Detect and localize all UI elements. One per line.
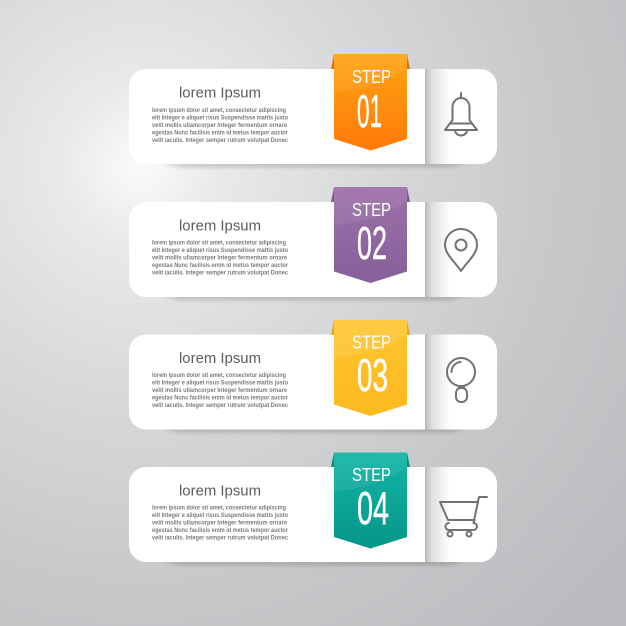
card body [129, 202, 497, 297]
panel: step 4 [129, 452, 497, 565]
text block: velit iaculis. Integer semper rutrum volutpat Donec [152, 534, 288, 542]
card shadow [160, 560, 470, 565]
text block: velit iaculis. Integer semper rutrum volutpat Donec [152, 402, 288, 409]
text block: velit mollis ullamcorper Integer fermentum ornare [152, 520, 287, 526]
card shadow [160, 428, 470, 432]
text block: velit mollis ullamcorper Integer fermentum ornare [152, 122, 287, 129]
icon: cart [440, 497, 487, 536]
heading: lorem Ipsum [179, 482, 261, 500]
text block: egestas Nunc facilisis enim id metus tempor auctor [152, 130, 288, 136]
heading: lorem Ipsum [179, 350, 261, 367]
ribbon: 02 [357, 217, 387, 269]
card fold [425, 202, 497, 297]
text block: velit mollis ullamcorper Integer fermentum ornare [152, 254, 287, 262]
text block: lorem ipsum dolor sit amet, consectetur adipiscing [152, 372, 286, 379]
ribbon [331, 320, 410, 416]
ribbon: 04 [357, 482, 389, 534]
icon: map pin [445, 229, 477, 271]
text block: velit iaculis. Integer semper rutrum volutpat Donec [152, 270, 288, 276]
text block [152, 240, 288, 276]
text block: velit iaculis. Integer semper rutrum volutpat Donec [152, 137, 288, 144]
card body [129, 467, 497, 562]
ribbon: STEP [352, 199, 391, 220]
card body [129, 69, 497, 164]
ribbon: 01 [357, 85, 382, 137]
card body [129, 334, 497, 430]
icon: magnifier [447, 358, 475, 402]
text block: egestas Nunc facilisis enim id metus tempor auctor [152, 394, 288, 402]
text block: elit Integer e aliquet risus Suspendisse mattis justo [152, 114, 288, 122]
text block [152, 107, 288, 144]
text block: elit Integer e aliquet risus Suspendisse mattis justo [152, 512, 288, 519]
card shadow [160, 295, 470, 300]
text block [152, 372, 288, 409]
panel: step 2 [129, 187, 497, 300]
ribbon [331, 187, 410, 283]
ribbon: STEP [352, 464, 391, 485]
text block: lorem ipsum dolor sit amet, consectetur adipiscing [152, 504, 286, 512]
card fold [425, 467, 497, 562]
text block: lorem ipsum dolor sit amet, consectetur adipiscing [152, 240, 286, 246]
card fold [425, 69, 497, 164]
ribbon: STEP [352, 66, 391, 87]
card fold [425, 334, 497, 430]
ribbon [331, 54, 410, 150]
card shadow [160, 162, 470, 167]
text block [152, 504, 288, 542]
text block: egestas Nunc facilisis enim id metus tempor auctor [152, 527, 288, 534]
text block: egestas Nunc facilisis enim id metus tempor auctor [152, 262, 288, 269]
ribbon [331, 452, 410, 548]
panel: step 1 [129, 54, 497, 167]
text block: elit Integer e aliquet risus Suspendisse mattis justo [152, 247, 288, 254]
text block: lorem ipsum dolor sit amet, consectetur adipiscing [152, 107, 286, 114]
text block: velit mollis ullamcorper Integer fermentum ornare [152, 387, 287, 394]
heading: lorem Ipsum [179, 218, 261, 234]
text block: elit Integer e aliquet risus Suspendisse mattis justo [152, 380, 288, 386]
icon: bell [445, 93, 477, 136]
ribbon: 03 [357, 349, 388, 401]
panel: step 3 [129, 320, 497, 432]
ribbon: STEP [352, 332, 391, 352]
heading: lorem Ipsum [179, 84, 261, 102]
